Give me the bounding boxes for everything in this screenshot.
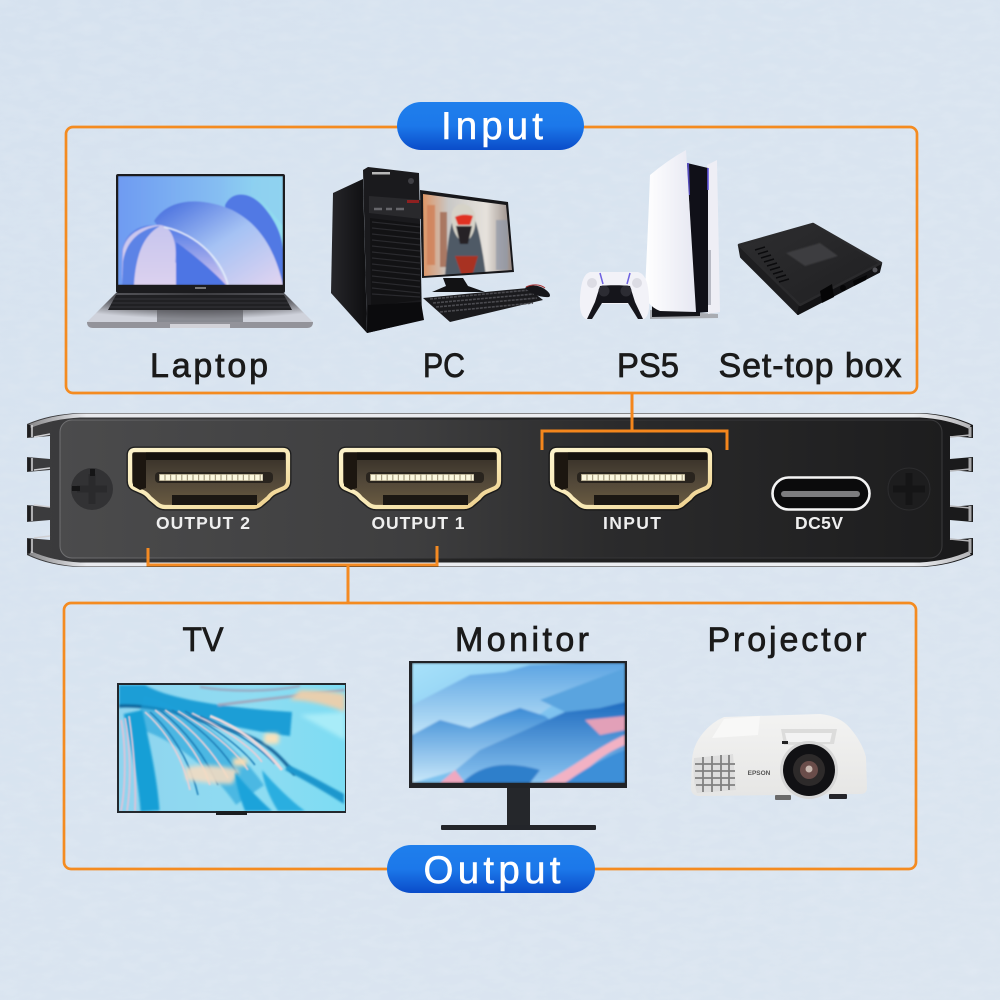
- panel: output devices frame: [64, 603, 916, 869]
- port label: OUTPUT 1: OUTPUT 1: [372, 513, 465, 533]
- heading: Input pill: Input: [441, 105, 543, 148]
- label: Set-top box: Set-top box: [718, 347, 902, 385]
- splitter face plate: [60, 420, 942, 558]
- panel: input devices frame: [66, 127, 917, 393]
- splitter metal body: [27, 413, 973, 567]
- screw left: [71, 468, 113, 510]
- port: HDMI output 2: [130, 450, 288, 507]
- icon: laptop: [87, 174, 313, 328]
- tower: [331, 167, 424, 333]
- icon: projector: EPSON: [748, 770, 771, 777]
- port label: DC5V: DC5V: [795, 513, 843, 533]
- icon: projector: [691, 714, 867, 800]
- keyboard and mouse: [423, 285, 550, 322]
- icon: PS5 console and controller: [580, 150, 720, 319]
- heading: Output pill: [387, 845, 595, 893]
- label: Monitor: Monitor: [455, 621, 589, 659]
- icon: set-top box: [739, 224, 881, 314]
- screw right: [888, 468, 930, 510]
- controller: [580, 272, 649, 319]
- heading: Output pill: Output: [424, 849, 561, 892]
- projector lens: [780, 741, 838, 799]
- label: Projector: Projector: [708, 621, 866, 659]
- projector vent grille: [693, 754, 736, 793]
- port label: INPUT: INPUT: [603, 513, 661, 533]
- label: Laptop: Laptop: [150, 347, 268, 385]
- connector: output bracket to frame: [148, 546, 437, 603]
- label: PS5: PS5: [617, 347, 679, 385]
- monitor: [420, 190, 515, 292]
- port label: OUTPUT 2: OUTPUT 2: [156, 513, 250, 533]
- label: TV: TV: [182, 621, 224, 659]
- icon: desktop PC: [331, 167, 550, 333]
- connector: input bracket to frame: [542, 393, 727, 450]
- port: HDMI output 1: [341, 450, 499, 507]
- port: HDMI input: [552, 450, 710, 507]
- device: HDMI splitter: [27, 413, 973, 567]
- heading: Input pill: [397, 102, 584, 150]
- label: PC: PC: [423, 347, 465, 385]
- icon: monitor: [409, 661, 627, 830]
- icon: TV: [117, 683, 346, 815]
- port: USB-C power: [772, 478, 870, 510]
